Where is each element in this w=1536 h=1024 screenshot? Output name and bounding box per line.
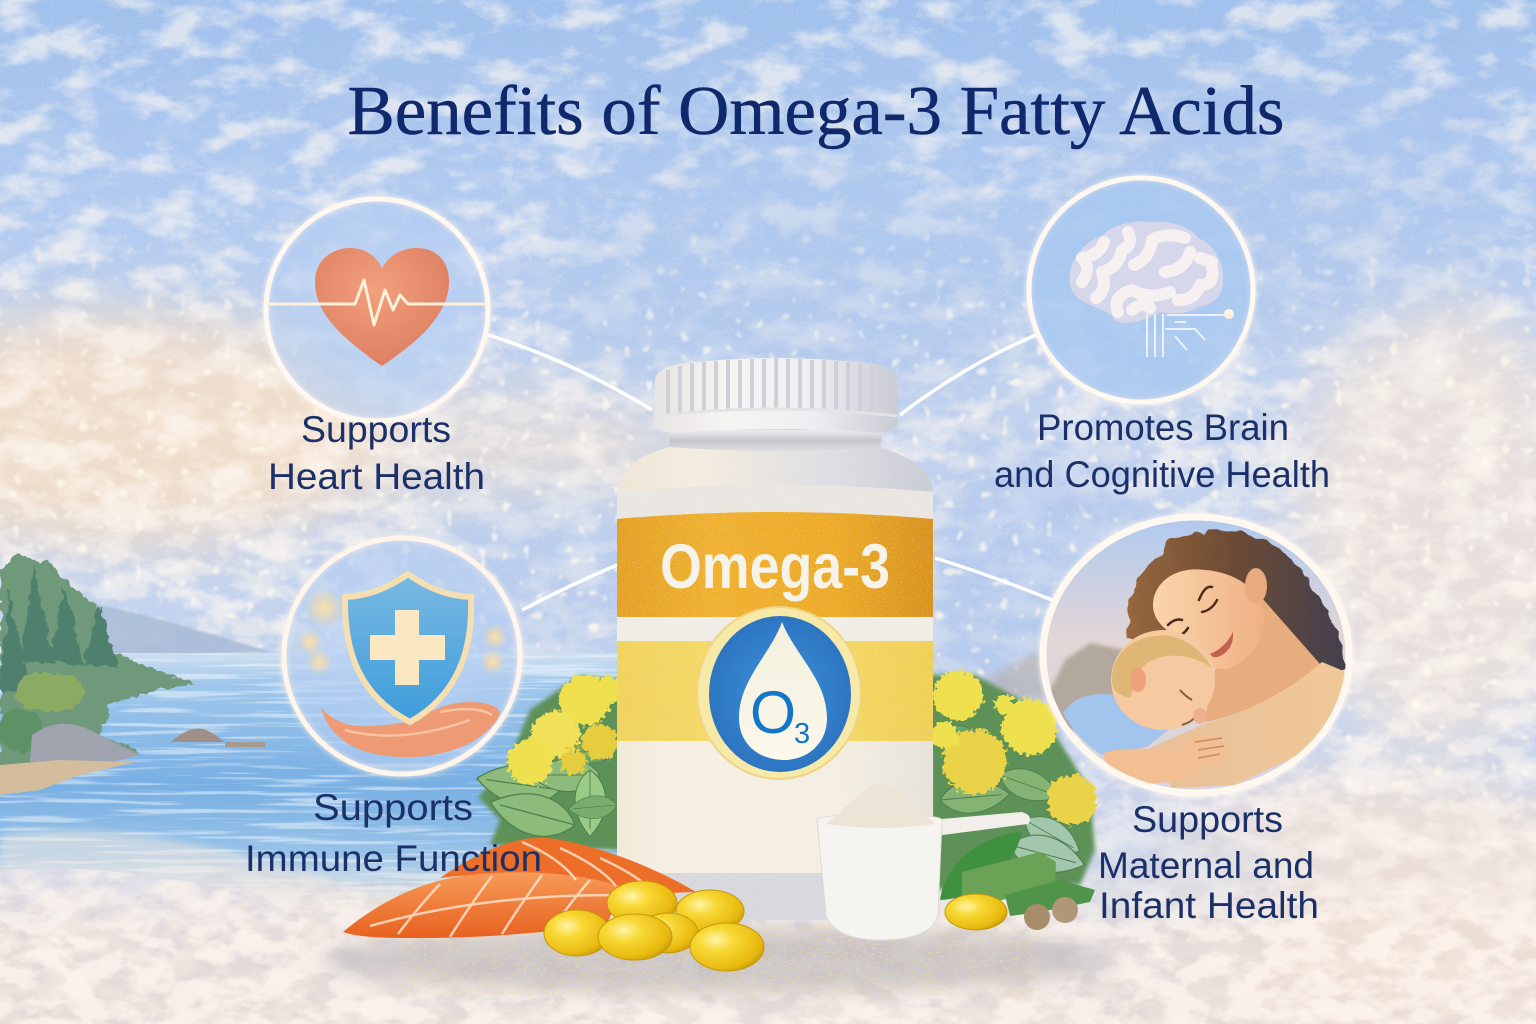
mother's face bbox=[1153, 569, 1264, 669]
icon: shield bbox=[345, 574, 471, 722]
baby's head bbox=[1111, 630, 1215, 730]
bottle base bbox=[660, 870, 880, 920]
yellow band bbox=[617, 641, 933, 741]
panel: heart health bbox=[266, 199, 488, 421]
panel: immune function bbox=[284, 538, 520, 774]
mother's shirt bbox=[1150, 662, 1346, 788]
bottle base highlight bbox=[617, 873, 933, 920]
green soft blocks and seeds bbox=[962, 852, 1095, 930]
O3 drop badge: O bbox=[750, 679, 796, 746]
title: Benefits of Omega-3 Fatty Acids bbox=[348, 73, 1284, 150]
icon: heart bbox=[315, 248, 449, 366]
mother's ear bbox=[1245, 568, 1267, 604]
icon: sparkles bbox=[297, 588, 508, 675]
baby's hand bbox=[1182, 735, 1226, 767]
baby's arm bbox=[1103, 749, 1200, 784]
bottle neck bbox=[668, 430, 884, 451]
icon: pulse line bbox=[267, 280, 487, 325]
label: promotes brain and cognitive health: and Cognitive Health bbox=[994, 454, 1330, 495]
fish oil capsules bbox=[544, 881, 764, 971]
blue haze patches bbox=[390, 70, 1520, 970]
scoop cup bbox=[817, 814, 942, 940]
icon: plus cross bbox=[370, 610, 445, 685]
bottle body bbox=[617, 447, 933, 873]
label: supports heart health bbox=[268, 409, 485, 497]
mother's neck and chest bbox=[1205, 590, 1320, 722]
label: promotes brain and cognitive health: Promotes Brain bbox=[1037, 407, 1289, 448]
panel: brain health bbox=[1029, 178, 1253, 402]
label: supports immune function: Supports bbox=[313, 787, 473, 828]
product name: Omega-3 bbox=[660, 532, 890, 602]
fish oil capsule beside scoop bbox=[945, 894, 1007, 930]
connector: immune to bottle bbox=[522, 565, 617, 610]
mother's lips bbox=[1210, 632, 1233, 657]
plants: right foliage bbox=[930, 670, 1097, 900]
label: supports maternal and infant health: Infant Health bbox=[1099, 885, 1319, 926]
baby's blue shirt bbox=[1063, 694, 1168, 755]
mother's hair bbox=[1127, 531, 1345, 670]
baby's ear bbox=[1130, 668, 1146, 692]
large dark leaf bbox=[940, 832, 1022, 900]
mother's closed eyes and brow bbox=[1168, 587, 1217, 635]
supplement bottle bbox=[617, 358, 933, 920]
salmon fillet bbox=[343, 838, 696, 938]
O3 drop badge bbox=[697, 607, 861, 779]
connector: maternal to bottle bbox=[935, 558, 1052, 600]
left foliage mass bbox=[478, 675, 620, 850]
baby's hair bbox=[1112, 635, 1212, 698]
bottle shoulder bbox=[617, 447, 933, 492]
label: supports immune function: Immune Function bbox=[245, 838, 542, 879]
right foliage mass bbox=[930, 675, 1095, 890]
label: supports maternal and infant health: Maternal and bbox=[1098, 845, 1314, 886]
label: supports heart health: Heart Health bbox=[268, 456, 485, 497]
bottle cap bbox=[654, 358, 898, 433]
orange band bbox=[617, 512, 933, 617]
scoop powder bbox=[826, 783, 935, 828]
connector: heart to bottle bbox=[488, 335, 652, 410]
connector: brain to bottle bbox=[900, 335, 1036, 415]
powder scoop bbox=[817, 783, 1030, 940]
icon: brain circuit bbox=[1147, 314, 1224, 357]
scoop handle bbox=[930, 812, 1030, 836]
distant trees inside circle bbox=[1045, 643, 1125, 730]
background: foreground ground and clouds bbox=[0, 850, 1536, 1024]
background: ocean bbox=[0, 653, 640, 915]
panel: maternal and infant health bbox=[1043, 517, 1349, 793]
O3 drop badge: 3 bbox=[794, 718, 810, 750]
plants: left foliage bbox=[474, 674, 624, 850]
label: promotes brain and cognitive health bbox=[994, 407, 1330, 495]
label: supports heart health: Supports bbox=[301, 409, 451, 450]
silver label band bbox=[617, 485, 933, 520]
baby's face details bbox=[1180, 690, 1196, 725]
background: right distant treeline bbox=[960, 640, 1120, 700]
background: distant hills bbox=[70, 600, 272, 660]
label: supports maternal and infant health bbox=[1098, 799, 1319, 926]
label: supports maternal and infant health: Supports bbox=[1132, 799, 1283, 840]
icon: salmon hand bbox=[321, 702, 500, 757]
label: supports immune function bbox=[245, 787, 542, 879]
icon: brain bbox=[1070, 222, 1234, 357]
background: forested coast bbox=[0, 555, 265, 795]
